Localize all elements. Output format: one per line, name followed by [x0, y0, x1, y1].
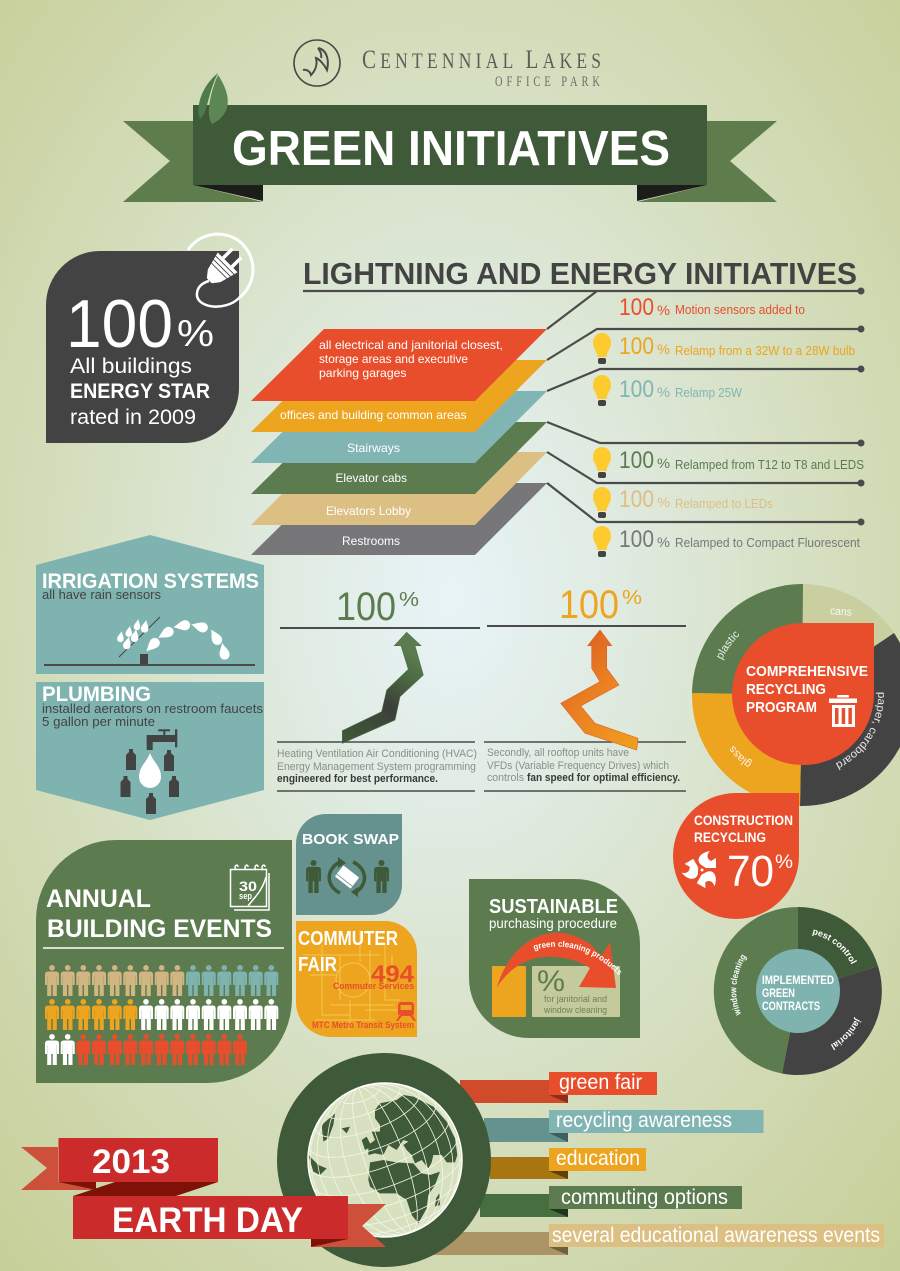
center drop — [732, 623, 874, 765]
description — [277, 748, 477, 785]
layer: elevator cabs: Elevator cabs — [336, 471, 407, 485]
icon: leaf — [199, 73, 228, 124]
row: LEDs: % — [657, 494, 670, 510]
chart: VFD 100% — [484, 583, 686, 791]
chart: HVAC 100% — [277, 585, 480, 791]
row: compact fluorescent: % — [657, 534, 670, 550]
center text — [746, 663, 868, 716]
ribbon body — [193, 105, 707, 185]
band: education — [549, 1147, 646, 1179]
chart: recycling donut — [692, 584, 900, 806]
ribbon folds — [193, 185, 707, 201]
row: motion sensors: % — [657, 302, 670, 318]
labels: glass — [730, 746, 752, 767]
row: LEDs: 100 — [619, 486, 654, 513]
row: T12 to T8: 100 — [619, 447, 654, 474]
panel: annual building events — [36, 840, 292, 1083]
segment labels: pest control — [812, 930, 857, 964]
layer: stairways — [251, 391, 547, 463]
logo mark — [294, 40, 340, 86]
description: Energy Management System programming — [277, 761, 476, 773]
figure: 494: 494 — [371, 961, 415, 988]
map lines — [303, 930, 410, 1030]
heading: RECYCLING — [694, 829, 766, 845]
continents — [308, 1095, 457, 1223]
icon: train — [396, 1002, 416, 1021]
text: all buildings energy star rated in 2009 — [70, 355, 210, 429]
subtext — [42, 701, 264, 729]
layer: electrical: parking garages — [319, 366, 406, 380]
base rule — [484, 741, 686, 743]
row: relamp 32W to 28W: 100 — [619, 333, 654, 360]
description: fan speed for optimal efficiency. — [527, 772, 680, 784]
panel shape — [36, 840, 292, 1083]
icon: trash can — [829, 695, 857, 727]
band: recycling awareness: recycling awareness — [556, 1109, 732, 1132]
connector lines — [303, 288, 864, 526]
row: relamp 25W — [593, 375, 742, 406]
subtext: all have rain sensors — [42, 587, 161, 602]
description: Secondly, all rooftop units have — [487, 747, 629, 759]
figure: 100%: % — [177, 313, 214, 354]
chart: green contracts donut — [714, 907, 882, 1075]
text: all buildings energy star rated in 2009: rated in 2009 — [70, 406, 196, 429]
row: T12 to T8: % — [657, 455, 670, 471]
icon: faucet — [147, 729, 177, 750]
labels — [717, 605, 884, 770]
top rule — [280, 627, 480, 629]
grid — [309, 1084, 462, 1236]
box: percent — [532, 965, 620, 1017]
figure: 100 — [336, 585, 396, 629]
heading — [46, 885, 272, 943]
band: recycling awareness — [549, 1109, 764, 1142]
layer: electrical: storage areas and executive — [319, 352, 468, 366]
layer: electrical — [251, 329, 547, 401]
panel: commuter fair — [296, 921, 417, 1037]
ribbon tails — [21, 1147, 386, 1247]
heading: lightning and energy: LIGHTNING AND ENERGY INITIATIVES — [303, 256, 857, 291]
heading — [298, 928, 398, 976]
center text — [762, 975, 834, 1013]
arrow — [561, 630, 638, 750]
band: commuting options — [549, 1186, 742, 1217]
box: percent: % — [537, 965, 565, 998]
row: compact fluorescent: 100 — [619, 526, 654, 553]
labels: paper, cardboard — [836, 692, 884, 770]
panel: energy star — [46, 234, 253, 443]
center text: PROGRAM — [746, 699, 817, 716]
icon: calendar: sep — [239, 891, 252, 901]
row: T12 to T8: Relamped from T12 to T8 and LEDS — [675, 458, 864, 472]
segment: janitorial — [782, 966, 882, 1075]
ribbon: 2013: 2013 — [92, 1143, 170, 1181]
segment: pest control — [798, 907, 878, 991]
row: motion sensors: 100 — [619, 294, 654, 321]
figure: % — [622, 587, 642, 609]
icons: bottles — [120, 749, 179, 814]
panel shape — [469, 879, 640, 1038]
stacked layers chart — [251, 329, 547, 555]
description — [487, 747, 680, 784]
heading: SUSTAINABLE — [489, 896, 618, 918]
subheading: purchasing procedure — [489, 915, 617, 931]
ribbon folds — [58, 1182, 348, 1247]
panel: plumbing — [36, 682, 264, 820]
panel: irrigation systems — [36, 535, 264, 674]
ribbon: Earth Day — [73, 1196, 348, 1240]
figure: 70%: 70 — [727, 847, 774, 896]
top rule — [487, 625, 686, 627]
globe — [277, 1053, 568, 1267]
row: T12 to T8 — [593, 447, 864, 478]
back bands — [430, 1080, 568, 1255]
logo: Centennial Lakes Office Park — [294, 40, 601, 89]
label: MTC: MTC Metro Transit System — [312, 1020, 414, 1030]
panel: construction recycling — [673, 793, 799, 919]
segment: cans — [802, 584, 894, 695]
ribbon: Earth Day: EARTH DAY — [112, 1201, 303, 1240]
panel shape — [296, 921, 417, 1037]
figure: 100 — [559, 583, 619, 627]
ribbon: 2013 Earth Day — [21, 1138, 386, 1247]
layer: offices — [251, 360, 547, 432]
outer ring — [277, 1053, 491, 1267]
people row 2 — [45, 999, 278, 1030]
row: relamp 32W to 28W: % — [657, 341, 670, 357]
heading: BOOK SWAP — [302, 831, 399, 848]
labels: cans — [830, 605, 853, 619]
arrow — [342, 632, 423, 743]
description: controls — [487, 772, 524, 784]
segment labels: janitorial — [830, 1017, 862, 1050]
layer: restrooms — [251, 483, 547, 555]
arrow: green cleaning products — [534, 940, 622, 975]
layer: restrooms: Restrooms — [342, 534, 400, 548]
label: commuter services: Commuter Services — [333, 981, 414, 991]
segment: window cleaning — [714, 907, 798, 1074]
row: motion sensors — [619, 294, 805, 321]
heading: ANNUAL — [46, 885, 151, 913]
row: LEDs — [593, 486, 773, 518]
segment labels — [730, 930, 862, 1050]
icon: people exchanging book — [306, 857, 389, 897]
row: relamp 32W to 28W — [593, 333, 855, 364]
people row 1 — [45, 965, 278, 996]
center text: CONTRACTS — [762, 1001, 820, 1013]
box: percent: for janitorial and — [544, 994, 607, 1004]
figure: 70%: % — [775, 852, 793, 873]
center text: COMPREHENSIVE — [746, 663, 868, 680]
layer: elevators lobby — [251, 452, 547, 525]
box: percent: window cleaning — [543, 1005, 607, 1015]
description: engineered for best performance. — [277, 773, 438, 785]
earth — [308, 1084, 462, 1236]
heading: COMMUTER — [298, 928, 398, 950]
heading: FAIR — [298, 954, 337, 976]
logo wordmark: CENTENNIAL LAKES — [362, 46, 601, 75]
figure: % — [399, 589, 419, 611]
band: green fair: green fair — [559, 1071, 642, 1094]
layer: offices: offices and building common areas — [280, 408, 466, 422]
layer: elevators lobby: Elevators Lobby — [326, 504, 411, 518]
icon: recycle swirl — [679, 851, 720, 892]
row: compact fluorescent — [593, 526, 860, 557]
center text: GREEN — [762, 988, 795, 1000]
panel shape — [36, 682, 264, 820]
heading: PLUMBING — [42, 683, 151, 706]
heading: BUILDING EVENTS — [47, 915, 272, 943]
band: commuting options: commuting options — [561, 1186, 728, 1209]
heading — [694, 812, 793, 845]
row: compact fluorescent: Relamped to Compact Fluorescent — [675, 536, 860, 550]
icon: plug — [188, 234, 253, 307]
arrow — [497, 932, 622, 988]
people row 3 — [45, 1034, 247, 1065]
panel: book swap — [296, 814, 402, 915]
segment: plastic — [692, 584, 803, 695]
title ribbon — [123, 73, 777, 202]
row: LEDs: Relamped to LEDs — [675, 497, 773, 511]
subtext: 5 gallon per minute — [42, 714, 155, 729]
icon: water drop — [139, 753, 161, 788]
panel shape — [46, 251, 239, 443]
row: relamp 25W: Relamp 25W — [675, 386, 742, 400]
center text: RECYCLING — [746, 681, 826, 698]
segment labels: window cleaning — [730, 954, 748, 1016]
center circle — [756, 949, 840, 1033]
box: orange — [492, 966, 526, 1017]
ribbon: 2013 — [58, 1138, 218, 1182]
row: relamp 32W to 28W: Relamp from a 32W to a 28W bulb — [675, 344, 855, 358]
segment: glass — [692, 693, 802, 806]
figure: 100%: 100 — [66, 286, 173, 362]
band: educational awareness events: several educational awareness events — [552, 1224, 880, 1247]
row: relamp 25W: % — [657, 384, 670, 400]
description: VFDs (Variable Frequency Drives) which — [487, 760, 669, 772]
title text: GREEN INITIATIVES — [232, 122, 670, 176]
panel shape — [296, 814, 402, 915]
ribbon tails — [123, 121, 777, 202]
panel shape — [36, 535, 264, 674]
row: relamp 25W: 100 — [619, 376, 654, 403]
logo subline: OFFICE PARK — [495, 73, 601, 89]
description: Heating Ventilation Air Conditioning (HVAC) — [277, 748, 477, 760]
labels: plastic — [717, 632, 739, 660]
band: green fair — [549, 1071, 657, 1103]
heading: IRRIGATION SYSTEMS — [42, 570, 259, 593]
panel: sustainable purchasing — [469, 879, 640, 1038]
icon: calendar: 30 — [239, 878, 257, 894]
text: all buildings energy star rated in 2009: All buildings — [70, 355, 192, 378]
heading: CONSTRUCTION — [694, 812, 793, 828]
layer: stairways: Stairways — [347, 441, 400, 455]
text: all buildings energy star rated in 2009: ENERGY STAR — [70, 380, 210, 403]
segment: paper, cardboard — [800, 633, 900, 806]
subtext: installed aerators on restroom faucets — [42, 701, 264, 716]
base rule — [277, 741, 475, 743]
layer: elevator cabs — [251, 422, 547, 494]
drop shape — [673, 793, 799, 919]
icon: calendar — [230, 865, 269, 910]
row: motion sensors: Motion sensors added to — [675, 303, 805, 317]
band: education: education — [556, 1147, 640, 1170]
center text: IMPLEMENTED — [762, 975, 834, 987]
icon: sprinkler — [44, 617, 255, 666]
layer: electrical: all electrical and janitorial closest, — [319, 338, 503, 352]
